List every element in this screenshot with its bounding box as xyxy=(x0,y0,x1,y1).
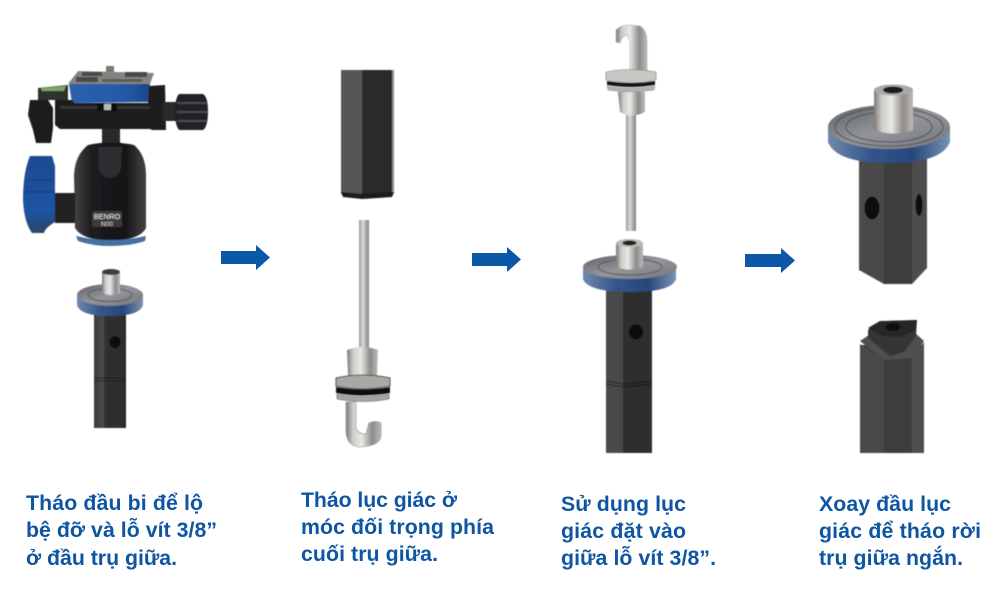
blue base ring xyxy=(76,236,146,246)
hex rod xyxy=(626,115,636,231)
caption 4: trụ giữa ngắn. xyxy=(819,545,963,570)
lower column section xyxy=(860,333,924,453)
clamp knob: left xyxy=(28,100,53,143)
logo plate xyxy=(92,211,122,228)
collar xyxy=(347,347,378,376)
hex rod xyxy=(359,220,369,350)
caption 2 xyxy=(301,488,494,566)
hook xyxy=(616,25,647,72)
arrow 2 xyxy=(472,247,521,272)
caption 4: Xoay đầu lục xyxy=(819,492,951,516)
caption 2: cuối trụ giữa. xyxy=(301,542,438,566)
ball slot xyxy=(98,147,122,178)
product: column and counterweight hook xyxy=(336,70,394,447)
threaded stud xyxy=(616,239,643,270)
rubber ring xyxy=(607,81,655,87)
platform disc xyxy=(583,255,677,292)
threaded stud xyxy=(102,269,120,295)
lock knob: blue xyxy=(23,156,75,233)
caption 4: giác để tháo rời xyxy=(819,519,981,543)
knurled disc lower xyxy=(337,394,389,402)
product: short column with platform xyxy=(77,269,143,428)
caption 2: Tháo lục giác ở xyxy=(301,488,458,512)
collar xyxy=(618,92,645,116)
logo plate: BENRO xyxy=(94,212,121,221)
hook xyxy=(346,402,381,447)
arrow 3 xyxy=(745,248,795,273)
threaded stud xyxy=(874,84,913,134)
knurled disc upper xyxy=(336,375,390,389)
caption 2: móc đối trọng phía xyxy=(301,515,494,539)
product: hex wrench inserted in column xyxy=(583,25,677,453)
knurled disc upper xyxy=(606,70,656,82)
clamp knob: right xyxy=(163,94,208,130)
ball stem xyxy=(102,129,120,151)
platform disc xyxy=(77,284,143,316)
caption 4 xyxy=(819,492,981,570)
caption 3 xyxy=(561,492,716,570)
arrow 1 xyxy=(221,245,270,270)
product: separated column sections xyxy=(828,84,950,453)
caption 1: ở đầu trụ giữa. xyxy=(26,546,177,570)
upper column section xyxy=(859,155,927,284)
caption 3: giác đặt vào xyxy=(561,519,686,543)
caption 3: giữa lỗ vít 3/8”. xyxy=(561,545,716,570)
caption 1: bệ đỡ và lỗ vít 3/8” xyxy=(26,517,217,542)
ball body xyxy=(74,142,146,241)
quick release plate xyxy=(68,66,154,103)
knurled disc lower xyxy=(607,86,655,92)
product: ball head xyxy=(23,66,208,246)
caption 1: Tháo đầu bi để lộ xyxy=(26,491,203,515)
rubber ring xyxy=(336,387,390,396)
column xyxy=(94,312,126,428)
platform disc xyxy=(828,105,950,163)
hex nub xyxy=(868,320,917,356)
square tube xyxy=(341,70,394,199)
logo plate: N00 xyxy=(101,221,113,228)
clamp body xyxy=(38,85,166,130)
caption 3: Sử dụng lục xyxy=(561,492,686,516)
caption 1 xyxy=(26,491,217,570)
column xyxy=(606,288,652,453)
